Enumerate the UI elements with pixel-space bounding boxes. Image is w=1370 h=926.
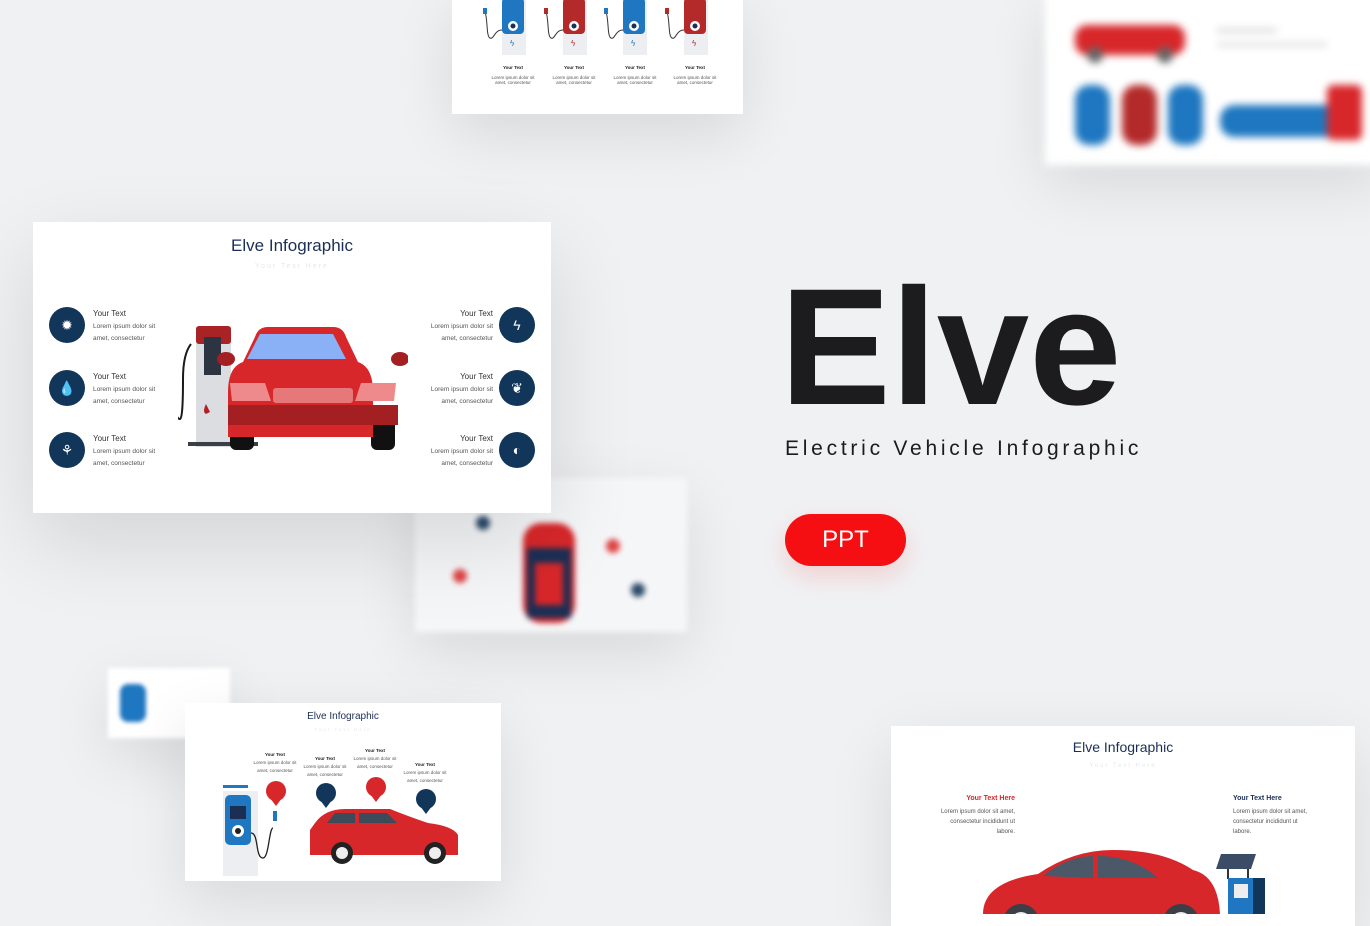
captions: amet, consectetur <box>677 80 713 85</box>
charger 3: ϟ <box>631 39 636 48</box>
captions: amet, consectetur <box>556 80 592 85</box>
right text: Your Text Here <box>1233 795 1282 802</box>
left items: ✹ <box>61 317 73 333</box>
right items: amet, consectetur <box>441 334 493 342</box>
blurred slide: small left <box>108 668 230 738</box>
title: Elve Infographic <box>231 236 353 255</box>
left items: Lorem ipsum dolor sit <box>93 448 155 455</box>
brand subtitle: Electric Vehicle Infographic <box>785 437 1142 460</box>
brand title: Elve <box>780 255 1121 440</box>
labels: amet, consectetur <box>307 772 343 777</box>
right items: amet, consectetur <box>441 460 493 466</box>
charger 2 <box>544 0 587 55</box>
left items: Your Text <box>93 372 126 381</box>
labels: amet, consectetur <box>357 764 393 769</box>
labels: Lorem ipsum dolor sit <box>403 770 447 775</box>
left items: amet, consectetur <box>93 398 145 404</box>
labels: Your Text <box>315 756 335 761</box>
captions: amet, consectetur <box>495 80 531 85</box>
title: Elve Infographic <box>1073 739 1173 755</box>
chargers row <box>483 0 708 55</box>
left items: Lorem ipsum dolor sit <box>93 323 155 330</box>
right items: Your Text <box>460 309 493 318</box>
charger 4 <box>665 0 708 55</box>
captions: Your Text <box>625 65 645 70</box>
left items: Lorem ipsum dolor sit <box>93 386 155 393</box>
captions <box>491 65 717 85</box>
captions: Lorem ipsum dolor sit <box>673 75 717 80</box>
right items <box>431 307 535 468</box>
charger 2: ϟ <box>571 39 576 48</box>
right items: Lorem ipsum dolor sit <box>431 448 493 455</box>
captions: Your Text <box>503 65 523 70</box>
right items: Lorem ipsum dolor sit <box>431 323 493 330</box>
blurred slide: car top view <box>415 478 687 632</box>
left items: ⚘ <box>61 442 73 458</box>
subtitle: Your Text Here <box>255 263 329 270</box>
PPT button <box>785 514 906 566</box>
right items: Your Text <box>460 372 493 381</box>
left items <box>49 307 156 468</box>
captions: Lorem ipsum dolor sit <box>552 75 596 80</box>
labels: Lorem ipsum dolor sit <box>353 756 397 761</box>
left items: Your Text <box>93 309 126 318</box>
right items: Lorem ipsum dolor sit <box>431 386 493 393</box>
illustration <box>983 850 1265 914</box>
charger 1 <box>483 0 526 55</box>
left text: Lorem ipsum dolor sit amet, consectetur incididunt ut labore. <box>941 809 1015 835</box>
labels: Lorem ipsum dolor sit <box>303 764 347 769</box>
left text: Your Text Here <box>966 795 1015 802</box>
illustration <box>223 777 458 876</box>
right items: Your Text <box>460 434 493 443</box>
labels: amet, consectetur <box>407 778 443 783</box>
labels: Lorem ipsum dolor sit <box>253 760 297 765</box>
right items: ◐ <box>513 442 521 458</box>
labels: amet, consectetur <box>257 768 293 773</box>
right items: ❦ <box>511 380 523 396</box>
blurred slide: top right <box>1045 0 1370 165</box>
labels: Your Text <box>415 762 435 767</box>
left text <box>941 795 1015 835</box>
PPT button: PPT <box>822 526 869 553</box>
slide: bottom left pins and car <box>185 703 501 881</box>
labels <box>253 748 447 783</box>
captions: Your Text <box>564 65 584 70</box>
captions: Lorem ipsum dolor sit <box>613 75 657 80</box>
right text: Lorem ipsum dolor sit amet, consectetur incididunt ut labore. <box>1233 809 1307 835</box>
subtitle: Your Text Here <box>1089 763 1157 769</box>
left items: amet, consectetur <box>93 334 145 342</box>
slide: bottom right side car <box>891 726 1355 926</box>
slide: main front car <box>33 222 551 513</box>
slide: bottom left pins and car: Your Text <box>365 748 385 753</box>
right text <box>1233 795 1307 835</box>
left items: Your Text <box>93 434 126 443</box>
captions: Lorem ipsum dolor sit <box>491 75 535 80</box>
right items: amet, consectetur <box>441 398 493 404</box>
illustration: pump and car <box>178 326 408 450</box>
slide: top chargers <box>452 0 743 114</box>
charger 4: ϟ <box>692 39 697 48</box>
subtitle: Your Text Here <box>314 727 372 732</box>
charger 1: ϟ <box>510 39 515 48</box>
left items: 💧 <box>58 380 76 396</box>
captions: amet, consectetur <box>617 80 653 85</box>
labels: Your Text <box>265 752 285 757</box>
captions: Your Text <box>685 65 705 70</box>
right items: ϟ <box>513 317 521 333</box>
left items: amet, consectetur <box>93 460 145 466</box>
title: Elve Infographic <box>307 711 379 722</box>
charger 3 <box>604 0 647 55</box>
